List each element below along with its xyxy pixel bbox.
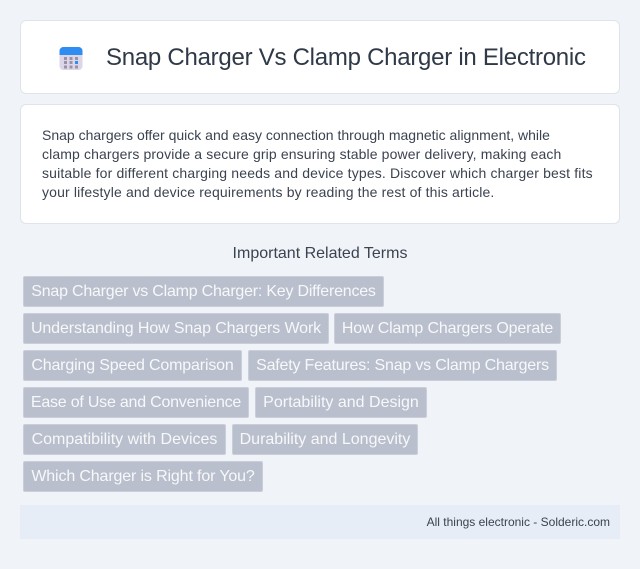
tag <box>23 313 329 344</box>
title: Snap Charger Vs Clamp Charger in Electronic <box>106 44 586 71</box>
header card <box>20 20 620 94</box>
tag <box>23 461 263 492</box>
tag: Compatibility with Devices <box>32 431 217 448</box>
tag <box>23 350 242 381</box>
tag <box>232 424 418 455</box>
footer bar <box>20 505 620 539</box>
intro text: Snap chargers offer quick and easy connection through magnetic alignment, while <box>42 127 550 143</box>
tag: Which Charger is Right for You? <box>31 468 255 485</box>
tag <box>248 350 557 381</box>
tag: How Clamp Chargers Operate <box>342 320 553 337</box>
related terms tags <box>23 276 561 492</box>
icon: calendar <box>60 47 82 70</box>
tag <box>334 313 561 344</box>
intro text panel <box>20 104 620 224</box>
tag <box>23 387 249 418</box>
heading: important related terms: Important Related Terms <box>233 245 407 262</box>
tag <box>255 387 427 418</box>
tag: Safety Features: Snap vs Clamp Chargers <box>256 357 549 374</box>
tag: Understanding How Snap Chargers Work <box>31 320 321 337</box>
tag <box>23 424 226 455</box>
intro text: suitable for different charging needs and device types. Discover which charger best fits <box>42 165 593 181</box>
intro text <box>42 127 593 200</box>
tag: Charging Speed Comparison <box>31 357 234 374</box>
tag: Snap Charger vs Clamp Charger: Key Differences <box>31 283 376 300</box>
intro text: clamp chargers provide a secure grip ensuring stable power delivery, making each <box>42 146 561 162</box>
tag: Portability and Design <box>263 394 419 411</box>
footer text: All things electronic - Solderic.com <box>427 515 610 529</box>
intro text: your lifestyle and device requirements by reading the rest of this article. <box>42 184 494 200</box>
tag: Durability and Longevity <box>240 431 410 448</box>
tag: Ease of Use and Convenience <box>31 394 241 411</box>
tag <box>23 276 384 307</box>
